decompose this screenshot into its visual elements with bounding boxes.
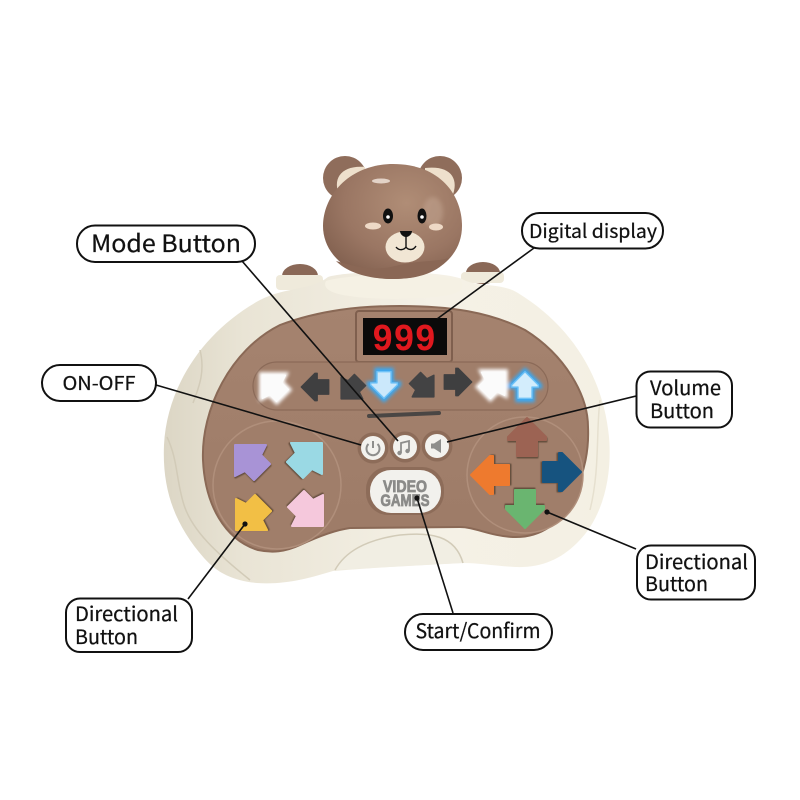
highlights (372, 178, 390, 184)
music button (390, 432, 420, 462)
VIDEO GAMES start button: VIDEO (383, 477, 427, 496)
label: Start/Confirm: Start/Confirm (416, 615, 540, 644)
label: Volume Button: Volume (650, 372, 721, 401)
label: Directional Button (right) (637, 546, 755, 600)
bear head (323, 156, 462, 299)
power button (358, 432, 388, 464)
label: ON-OFF: ON-OFF (62, 369, 136, 396)
label: Mode Button: Mode Button (91, 224, 241, 259)
volume button (422, 430, 452, 462)
label: Volume Button (636, 372, 732, 428)
label: Directional Button (left): Directional (75, 598, 178, 627)
label: Directional Button (left) (66, 598, 192, 652)
readout 999: 999 (372, 319, 436, 362)
ears (323, 156, 462, 200)
rust up arrow (508, 418, 546, 456)
purple arrow (235, 445, 270, 480)
right direction pad (467, 417, 583, 533)
navy right arrow (543, 453, 581, 491)
muzzle (386, 232, 424, 262)
arrow light strip (253, 362, 548, 410)
brown control panel (203, 306, 588, 552)
label: ON-OFF (42, 365, 156, 401)
yellow arrow (236, 495, 271, 530)
leader lines (156, 248, 636, 613)
label: Directional Button (left): Button (75, 621, 138, 650)
game console (164, 262, 610, 583)
label: Volume Button: Button (650, 395, 714, 424)
speaker slot (369, 413, 439, 416)
cyan arrow (287, 443, 322, 478)
strip arrows (262, 368, 538, 401)
label: Directional Button (right): Directional (645, 546, 748, 575)
nose and mouth (396, 231, 416, 250)
label: Directional Button (right): Button (645, 568, 708, 597)
green down arrow (506, 490, 544, 528)
shoulder knobs (276, 262, 504, 290)
digital display (356, 311, 452, 362)
glow behind lit arrows (260, 369, 541, 403)
label: Digital display (522, 213, 663, 248)
neck collar (325, 275, 462, 299)
orange left arrow (471, 456, 509, 494)
pink arrow (288, 491, 323, 526)
left direction pad (213, 421, 341, 549)
label: Digital display: Digital display (529, 217, 657, 244)
cream body (164, 272, 610, 583)
cheeks (365, 222, 443, 230)
body contour lines (167, 350, 600, 580)
VIDEO GAMES start button (366, 467, 444, 515)
chin shading (336, 258, 449, 279)
leader dots (242, 495, 550, 527)
VIDEO GAMES start button: GAMES (380, 491, 430, 510)
eyes (383, 208, 426, 224)
